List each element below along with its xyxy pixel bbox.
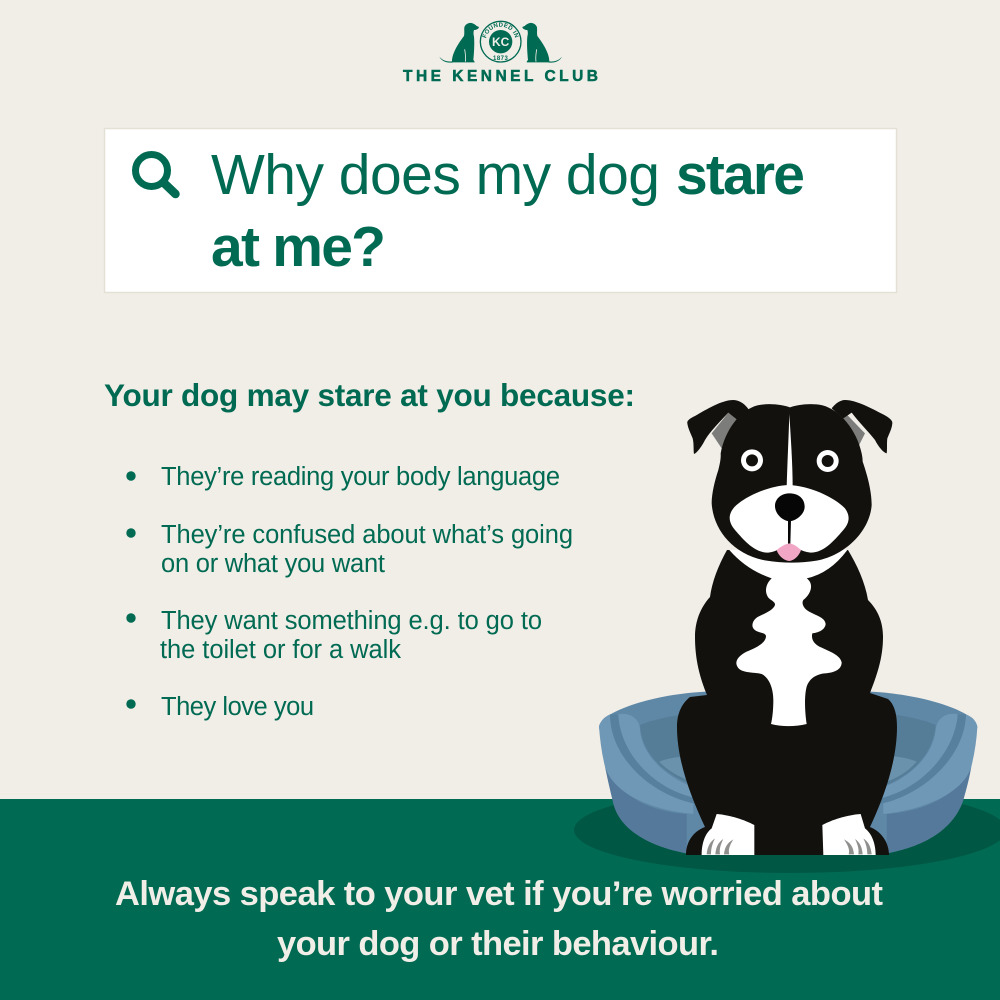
dog <box>677 400 897 855</box>
logo emblem: two seated dogs and roundel: 1873 <box>493 56 508 62</box>
dog body <box>677 550 897 855</box>
footer message <box>115 875 884 963</box>
muzzle <box>730 485 849 553</box>
grey inner ears <box>712 413 865 448</box>
title: stare <box>676 143 805 207</box>
subheading: Your dog may stare at you because: <box>104 377 635 413</box>
footer message: your dog or their behaviour. <box>277 925 719 963</box>
dog chest marking <box>729 550 847 726</box>
title: at me? <box>211 215 386 279</box>
logo emblem: two seated dogs and roundel: FOUNDED IN <box>482 22 519 38</box>
bullet list: reasons: the toilet or for a walk <box>160 636 401 664</box>
nose and mouth line <box>775 493 805 544</box>
bullet list: reasons: They want something e.g. to go to <box>161 607 542 635</box>
bullet list: reasons <box>126 463 573 721</box>
footer message: Always speak to your vet if you’re worried about <box>115 875 884 913</box>
logo wordmark: THE KENNEL CLUB <box>403 68 598 85</box>
logo: The Kennel Club <box>402 20 598 85</box>
dog head <box>687 400 892 563</box>
bullet list: reasons: They love you <box>161 693 314 721</box>
logo emblem: two seated dogs and roundel <box>440 20 562 63</box>
icon: magnifying glass <box>136 154 176 194</box>
dog ears <box>687 400 892 454</box>
title <box>211 143 805 279</box>
head shape <box>712 404 872 563</box>
bullet list: reasons: They’re reading your body language <box>161 463 560 491</box>
dog bed shadow <box>574 787 1000 873</box>
title: Why does my dog <box>211 143 660 207</box>
bullet list: reasons: They’re confused about what’s going <box>161 521 573 549</box>
bullet list: reasons: on or what you want <box>161 550 385 578</box>
footer band <box>0 799 1000 1000</box>
search box <box>104 128 896 292</box>
dog eyes <box>741 449 839 472</box>
tongue <box>777 543 801 561</box>
logo emblem: two seated dogs and roundel: KC <box>492 35 510 49</box>
dog bed <box>599 692 977 853</box>
forehead stripe <box>787 414 793 487</box>
dog front paws <box>702 814 876 855</box>
